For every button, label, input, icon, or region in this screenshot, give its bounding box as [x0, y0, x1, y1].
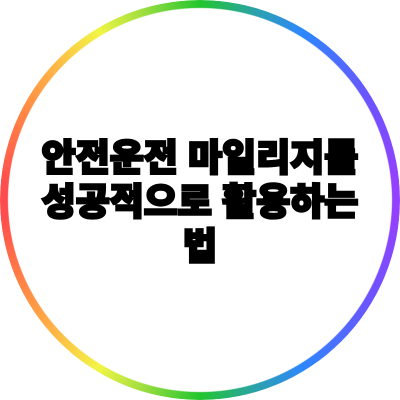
title line 3: 법: [183, 226, 217, 267]
title line 1: 안전운전 마일리지를: [42, 138, 358, 178]
title line 2: 성공적으로 활용하는: [42, 182, 358, 222]
